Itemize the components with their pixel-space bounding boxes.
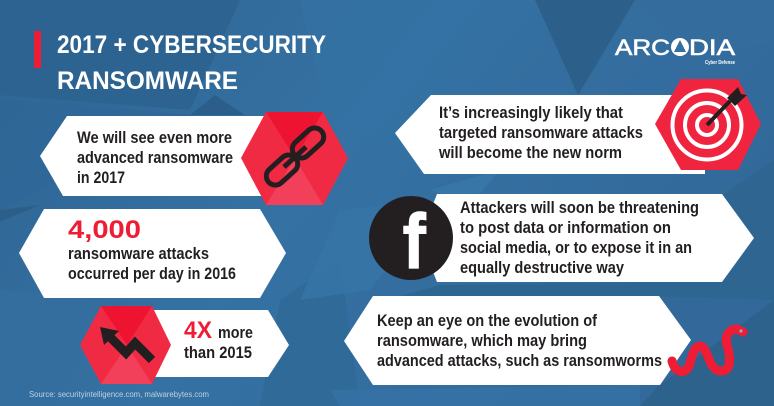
- text: ransomware attacks: [68, 245, 209, 263]
- source note: Source: securityintelligence.com, malwarebytes.com: [29, 389, 209, 399]
- panel: ransomworms: [344, 296, 743, 385]
- text: in 2017: [77, 169, 125, 187]
- text: equally destructive way: [460, 259, 625, 277]
- text: [460, 199, 699, 277]
- logo: Arcadia Cyber Defense: ARC: [615, 35, 670, 60]
- text: [184, 324, 253, 362]
- text: Keep an eye on the evolution of: [377, 312, 597, 330]
- text: will become the new norm: [438, 144, 622, 162]
- text: social media, or to expose it in an: [460, 239, 692, 257]
- icon: facebook: f: [404, 200, 425, 283]
- text: [77, 129, 233, 187]
- title accent bar: [34, 31, 41, 68]
- text: [377, 312, 662, 370]
- logo: Arcadia Cyber Defense: [615, 35, 735, 66]
- text: It’s increasingly likely that: [439, 104, 623, 122]
- panel: targeted attacks: [395, 79, 761, 174]
- text: to post data or information on: [460, 219, 671, 237]
- icon: chain link: [241, 112, 348, 205]
- text: occurred per day in 2016: [68, 265, 236, 283]
- icon: facebook: [369, 196, 453, 283]
- title: 2017 + CYBERSECURITY: [57, 31, 326, 59]
- panel: social media threats: [369, 194, 754, 283]
- title: RANSOMWARE: [57, 67, 238, 95]
- logo: Arcadia Cyber Defense: DIA: [689, 35, 735, 60]
- text: ransomware, which may bring: [377, 332, 587, 350]
- panel: advanced ransomware: [40, 112, 348, 205]
- text: We will see even more: [77, 129, 232, 147]
- icon: rising arrow: [80, 306, 171, 384]
- text: targeted ransomware attacks: [439, 124, 643, 142]
- text: [438, 104, 643, 162]
- text: than 2015: [184, 344, 252, 362]
- stat: 4X: 4X: [184, 317, 212, 344]
- text: more: [218, 324, 253, 342]
- text: advanced ransomware: [77, 149, 233, 167]
- stat: 4,000: 4,000: [68, 216, 141, 244]
- icon: target with dart: [655, 79, 761, 170]
- icon: worm: [672, 329, 743, 372]
- panel: 4X more: [80, 306, 289, 384]
- logo: Arcadia Cyber Defense: Cyber Defense: [705, 60, 735, 66]
- text: advanced attacks, such as ransomworms: [377, 352, 662, 370]
- panel: 4,000 attacks: [19, 209, 286, 298]
- text: [68, 245, 236, 283]
- text: Attackers will soon be threatening: [460, 199, 699, 217]
- title: [57, 31, 326, 95]
